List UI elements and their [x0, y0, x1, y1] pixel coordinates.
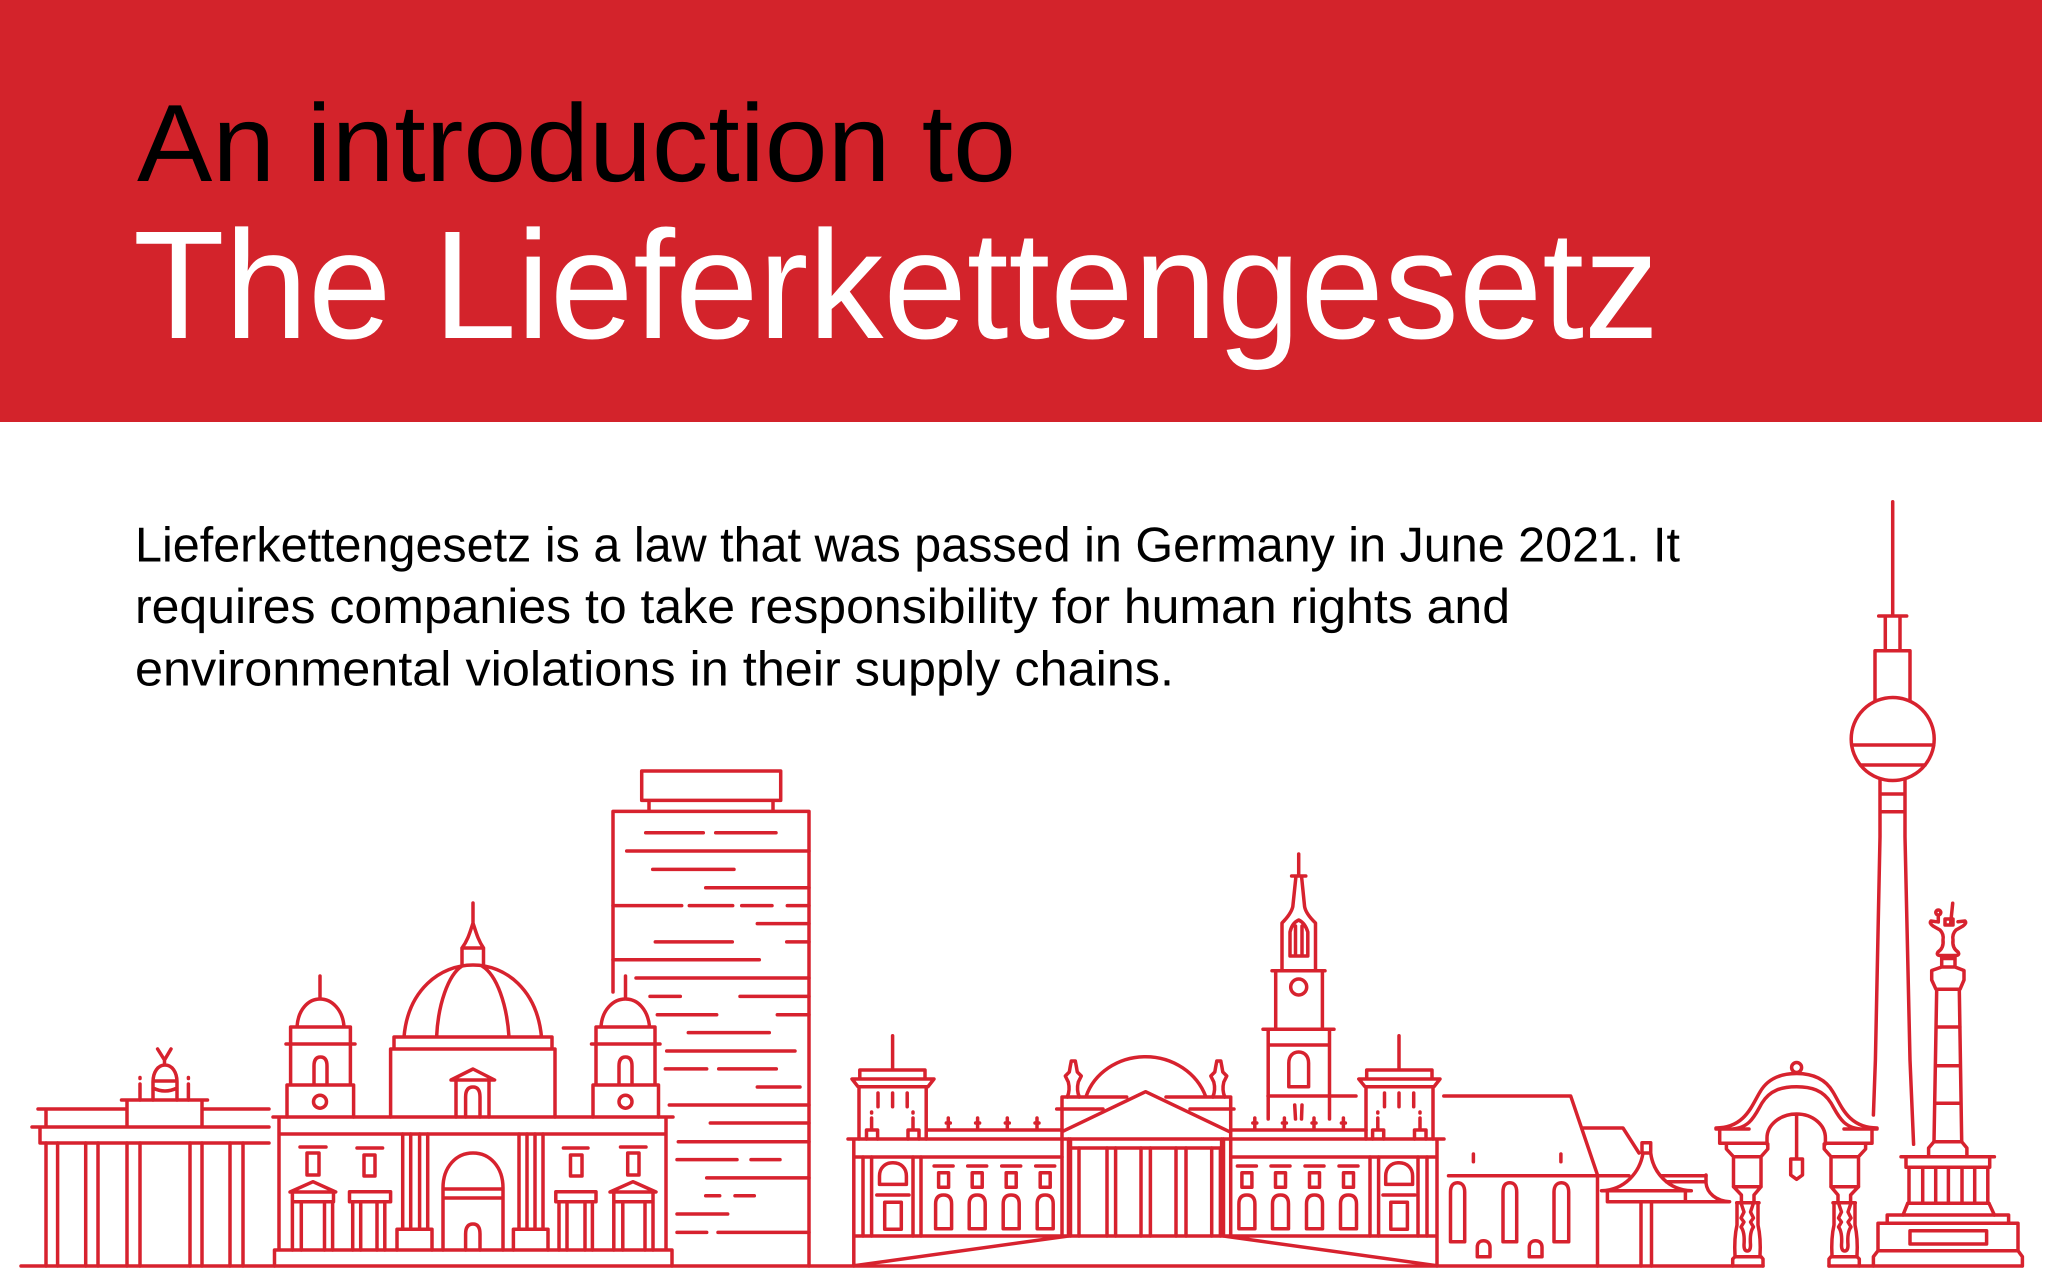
column shaft [1932, 956, 1964, 1142]
cathedral left tower [286, 976, 355, 1117]
cathedral drum portal [451, 1069, 495, 1117]
cathedral right tower [592, 976, 660, 1117]
cathedral windows and portals [300, 1147, 646, 1176]
header banner [0, 0, 2042, 422]
Reichstag right bay [1370, 1157, 1427, 1236]
title line: The Lieferkettengesetz: The Lieferkettengesetz [133, 199, 1659, 371]
arch right pillar [1824, 1129, 1872, 1203]
Reichstag left bay [863, 1157, 921, 1236]
Reichstag wing windows [934, 1166, 1358, 1229]
Reichstag right corner tower [1359, 1036, 1440, 1139]
arch left pillar [1720, 1129, 1768, 1203]
Reichstag roof statues [1065, 1061, 1081, 1097]
landmark: TV tower [1851, 502, 1934, 1144]
landmark: Reichstag [848, 1036, 1444, 1266]
landmark: church tower [1263, 854, 1356, 1119]
intro paragraph: requires companies to take responsibility for human rights and [135, 580, 1510, 634]
Reichstag roof finials [927, 1118, 1366, 1130]
Victoria statue [1930, 903, 1966, 956]
landmark: Berlin Cathedral [273, 903, 673, 1266]
cathedral main dome [391, 903, 555, 1117]
intro paragraph [135, 519, 1680, 697]
cathedral columns and central arch [397, 1134, 548, 1250]
landmark: church nave [1444, 1096, 1730, 1266]
ground line [21, 1264, 2022, 1268]
title line: An introduction to: An introduction to [137, 82, 1016, 205]
Reichstag left corner tower [852, 1036, 934, 1139]
landmark: Brandenburg Gate [32, 1049, 269, 1266]
Reichstag glass dome [1086, 1057, 1206, 1097]
landmark: elephant gate arch [1716, 1062, 1877, 1266]
Reichstag portico and pediment [1057, 1092, 1234, 1236]
landmark: pagoda pavilion [1602, 1143, 1691, 1266]
intro paragraph: environmental violations in their supply chains. [135, 643, 1174, 697]
Berlin skyline illustration [21, 502, 2022, 1266]
landmark: Victory Column [1873, 903, 2022, 1266]
intro paragraph: Lieferkettengesetz is a law that was passed in Germany in June 2021. It [135, 519, 1680, 573]
column pedestal [1901, 1142, 1994, 1167]
landmark: office tower [613, 771, 809, 1266]
